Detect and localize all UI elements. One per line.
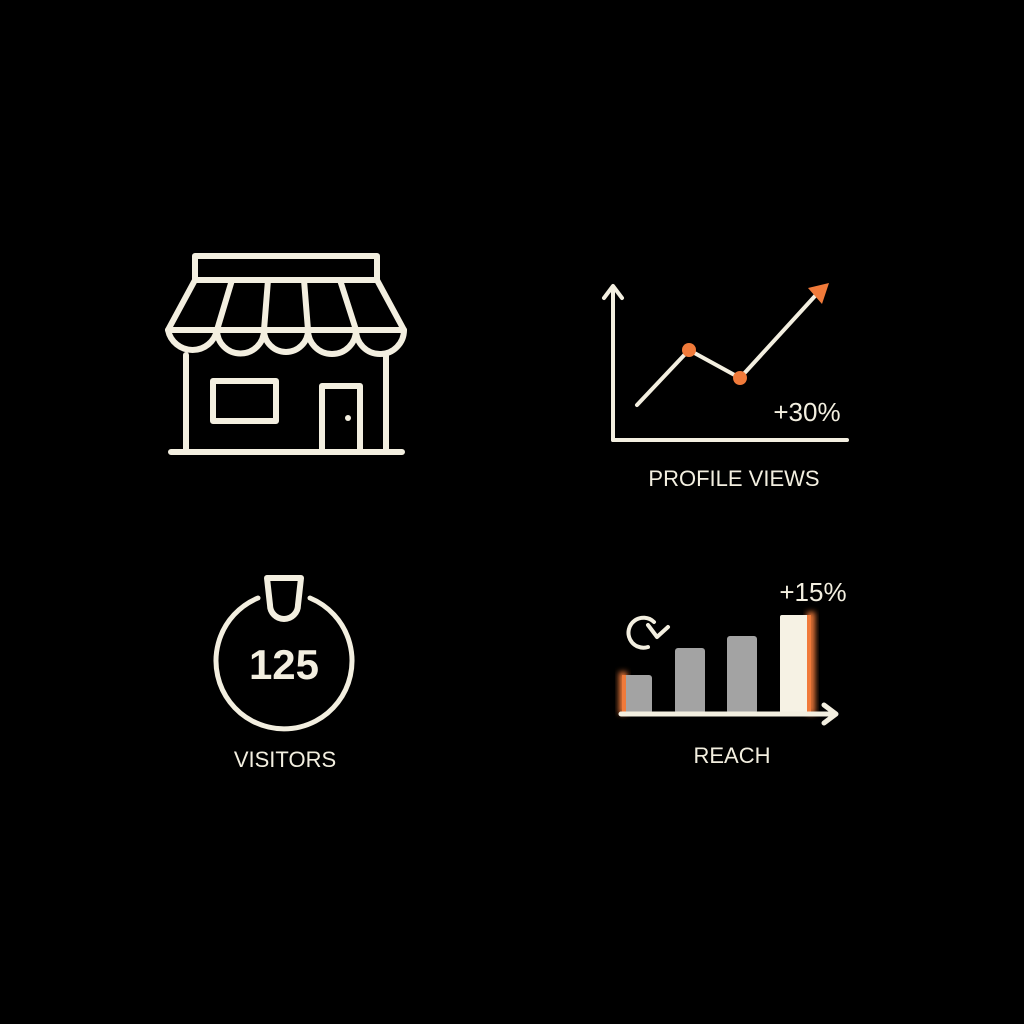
text: +15%: +15% <box>779 577 847 607</box>
chart: profile views line chart <box>604 283 847 440</box>
icon: refresh <box>628 618 654 648</box>
text: +30%: +30% <box>773 397 841 427</box>
text: 125: 125 <box>249 641 319 688</box>
icon: storefront <box>168 256 404 452</box>
label: visitors: VISITORS <box>234 747 336 772</box>
icon: visitors counter circle <box>216 578 352 729</box>
label: reach: REACH <box>693 743 771 768</box>
label: profile views: PROFILE VIEWS <box>648 466 820 491</box>
chart: reach bar chart <box>619 577 847 723</box>
